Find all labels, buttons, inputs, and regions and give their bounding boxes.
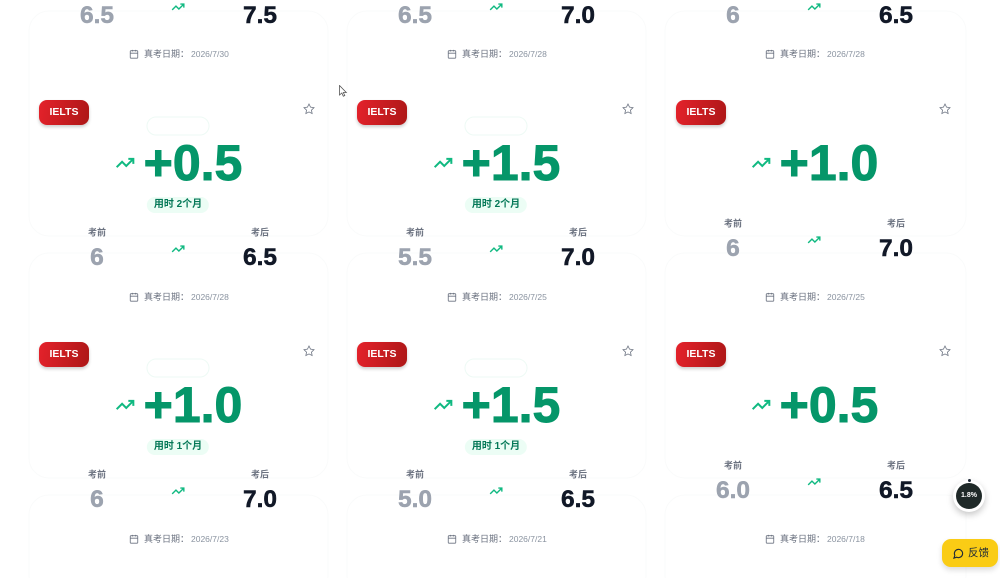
study duration pill: 用时 2个月 (154, 199, 202, 210)
exam date: 2026/7/18 (827, 534, 865, 544)
after label: 考后 (569, 228, 587, 238)
exam date: 2026/7/30 (191, 48, 229, 58)
icon: trend arrow (808, 236, 821, 244)
icon: calendar (130, 534, 138, 544)
exam date: 2026/7/28 (191, 292, 229, 302)
icon: chat bubble (953, 548, 964, 559)
score increase: +0.5 (144, 135, 242, 191)
before score: 6.5 (80, 2, 114, 29)
feedback button (942, 539, 998, 567)
exam date: 2026/7/25 (509, 292, 547, 302)
after label: 考后 (887, 460, 905, 470)
icon: large trend arrow (116, 158, 134, 168)
badge: IELTS: IELTS (368, 106, 396, 118)
badge: IELTS: IELTS (50, 348, 78, 360)
progress marker (968, 479, 970, 482)
icon: trend arrow (172, 487, 185, 494)
before score: 6.5 (398, 2, 432, 29)
icon: trend arrow (490, 487, 503, 494)
progress value: 1.8% (961, 492, 977, 499)
after label: 考后 (887, 218, 905, 228)
icon: trend arrow (490, 245, 503, 252)
study duration pill (147, 197, 209, 213)
study duration pill (465, 439, 527, 455)
exam date label: 真考日期： (462, 292, 507, 302)
after score: 7.0 (561, 2, 595, 29)
icon: calendar (766, 534, 774, 544)
badge: IELTS: IELTS (686, 348, 715, 360)
study duration pill: 用时 1个月 (154, 441, 202, 452)
after score: 6.5 (561, 486, 595, 513)
study duration pill (465, 197, 527, 213)
after score: 6.5 (243, 244, 277, 271)
card: IELTS +1.5 in 1 month (356, 342, 634, 544)
icon: large trend arrow (752, 400, 770, 410)
icon: calendar (130, 292, 138, 302)
before label: 考前 (406, 470, 424, 480)
card: IELTS +1.5 in 2 months (356, 100, 634, 302)
score increase: +0.5 (780, 377, 878, 433)
before label: 考前 (724, 218, 742, 228)
score increase: +1.0 (144, 377, 242, 433)
card: IELTS +1.0 (674, 100, 951, 302)
badge: IELTS (39, 100, 89, 125)
after label: 考后 (569, 470, 587, 480)
progress widget: 1.8% (953, 480, 985, 512)
before score: 6 (726, 235, 740, 262)
exam date label: 真考日期： (780, 534, 825, 544)
card: IELTS +0.5 (674, 342, 951, 544)
study duration pill: 用时 2个月 (472, 199, 520, 210)
icon: trend arrow (490, 3, 503, 10)
icon: favourite star (303, 103, 315, 114)
before score: 6 (726, 2, 740, 29)
icon: trend arrow (172, 245, 185, 252)
icon: favourite star (622, 345, 634, 356)
icon: large trend arrow (752, 158, 770, 168)
after label: 考后 (251, 228, 269, 238)
icon: large trend arrow (434, 158, 452, 168)
icon: trend arrow (808, 3, 821, 10)
after label: 考后 (251, 470, 269, 480)
icon: large trend arrow (434, 400, 452, 410)
after score: 6.5 (879, 477, 913, 504)
study duration pill: 用时 1个月 (472, 441, 520, 452)
after score: 7.0 (243, 486, 277, 513)
exam date label: 真考日期： (144, 292, 189, 302)
card fragment: top middle scores (398, 2, 595, 59)
badge: IELTS: IELTS (686, 106, 715, 118)
progress value (956, 483, 982, 509)
before label: 考前 (724, 460, 742, 470)
exam date label: 真考日期： (144, 48, 189, 58)
after score: 7.0 (561, 244, 595, 271)
icon: calendar (448, 50, 456, 59)
card fragment: top right scores (726, 2, 913, 59)
exam date label: 真考日期： (144, 534, 189, 544)
score increase: +1.5 (462, 135, 560, 191)
exam date label: 真考日期： (780, 48, 825, 58)
score increase: +1.5 (462, 377, 560, 433)
before score: 6.0 (716, 477, 750, 504)
icon: calendar (766, 292, 774, 302)
icon: calendar (130, 50, 138, 59)
study duration pill (147, 439, 209, 455)
icon: favourite star (939, 345, 951, 356)
before label: 考前 (406, 228, 424, 238)
badge: IELTS: IELTS (368, 348, 396, 360)
feedback label: 反馈 (968, 547, 989, 559)
badge: IELTS (39, 342, 89, 367)
exam date: 2026/7/23 (191, 534, 229, 544)
badge: IELTS (357, 100, 407, 125)
badge: IELTS (676, 100, 726, 125)
exam date label: 真考日期： (462, 48, 507, 58)
badge: IELTS (676, 342, 726, 367)
icon: mouse cursor (339, 85, 348, 97)
icon: favourite star (303, 345, 315, 356)
card: IELTS +0.5 in 2 months (38, 100, 315, 302)
icon: trend arrow (808, 478, 821, 486)
after score: 7.0 (879, 235, 913, 262)
icon: calendar (448, 534, 456, 544)
before score: 6 (90, 244, 104, 271)
icon: favourite star (939, 103, 951, 114)
icon: calendar (448, 292, 456, 302)
badge: IELTS (357, 342, 407, 367)
badge: IELTS: IELTS (50, 106, 78, 118)
icon: trend arrow (172, 3, 185, 10)
exam date: 2026/7/28 (509, 48, 547, 58)
before score: 5.0 (398, 486, 432, 513)
before label: 考前 (88, 228, 106, 238)
before score: 6 (90, 486, 104, 513)
exam date: 2026/7/28 (827, 48, 865, 58)
card: IELTS +1.0 in 1 month (38, 342, 315, 544)
exam date label: 真考日期： (780, 292, 825, 302)
before score: 5.5 (398, 244, 432, 271)
after score: 6.5 (879, 2, 913, 29)
icon: favourite star (622, 103, 634, 114)
exam date: 2026/7/25 (827, 292, 865, 302)
exam date: 2026/7/21 (509, 534, 547, 544)
exam date label: 真考日期： (462, 534, 507, 544)
icon: calendar (766, 50, 774, 59)
icon: large trend arrow (116, 400, 134, 410)
score increase: +1.0 (780, 135, 878, 191)
after score: 7.5 (243, 2, 277, 29)
card fragment: top left scores (80, 2, 277, 59)
before label: 考前 (88, 470, 106, 480)
